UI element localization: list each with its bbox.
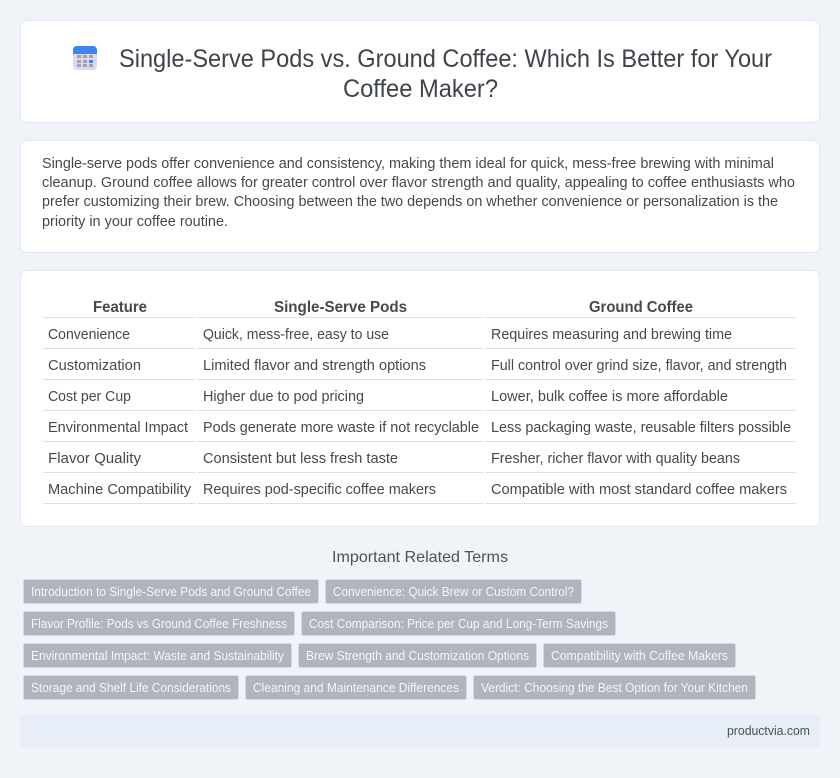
panel: comparison table [20,270,820,526]
related term tags: Verdict: Choosing the Best Option for Your Kitchen [481,680,748,695]
row: convenience: Requires measuring and brewing time [491,327,732,343]
related term tags: Compatibility with Coffee Makers [551,648,728,663]
panel: intro text: Single-serve pods offer convenience and consistency, making them ideal for quick, mess-free brewing with minimal [42,156,774,172]
related term tags: Flavor Profile: Pods vs Ground Coffee Freshness [31,616,287,631]
row: flavor quality: Flavor Quality [48,451,142,467]
row: flavor quality: Consistent but less fresh taste [203,451,398,467]
table header: Single-Serve Pods [274,299,407,316]
title card [20,20,820,122]
related term tags: Convenience: Quick Brew or Custom Control? [333,584,574,599]
title: Coffee Maker? [343,75,498,103]
row: cost per cup: Lower, bulk coffee is more affordable [491,389,728,405]
table header [93,299,693,316]
related term tags: Introduction to Single-Serve Pods and Ground Coffee [31,584,311,599]
row: environmental impact [48,420,791,436]
row: customization: Customization [48,358,141,374]
title: Single-Serve Pods vs. Ground Coffee: Which Is Better for Your [119,45,772,73]
row: environmental impact: Environmental Impact [48,420,188,436]
row: customization: Full control over grind size, flavor, and strength [491,358,787,374]
row: convenience [48,327,732,343]
row: customization [48,358,787,374]
row: cost per cup [48,389,728,405]
row: environmental impact: Less packaging waste, reusable filters possible [491,420,791,436]
table header: Feature [93,299,147,316]
related term tags: Brew Strength and Customization Options [306,648,529,663]
icon: calendar [73,46,97,70]
panel: intro text: prefer customizing their brew. Choosing between the two depends on whether convenience or personalization is the [42,194,778,210]
row: flavor quality [48,451,740,467]
row: cost per cup: Cost per Cup [48,389,131,405]
row: cost per cup: Higher due to pod pricing [203,389,364,405]
row: convenience: Convenience [48,327,130,343]
row: flavor quality: Fresher, richer flavor with quality beans [491,451,740,467]
panel: intro text: cleanup. Ground coffee allows for greater control over flavor strength and quality, appealing to coffee enthusiasts who [42,175,795,191]
row: environmental impact: Pods generate more waste if not recyclable [203,420,479,436]
related term tags: Cleaning and Maintenance Differences [253,680,459,695]
row: customization: Limited flavor and strength options [203,358,426,374]
row: machine compatibility: Requires pod-specific coffee makers [203,482,436,498]
related term tags [24,580,756,700]
row: convenience: Quick, mess-free, easy to use [203,327,389,343]
panel: intro text: priority in your coffee routine. [42,214,228,230]
heading: related terms: Important Related Terms [332,549,508,566]
related term tags: Cost Comparison: Price per Cup and Long-Term Savings [309,616,608,631]
related term tags: Storage and Shelf Life Considerations [31,680,231,695]
related term tags: Environmental Impact: Waste and Sustainability [31,648,284,663]
row: machine compatibility: Machine Compatibility [48,482,192,498]
panel: intro text [20,140,820,252]
title [119,45,772,103]
table header: Ground Coffee [589,299,693,316]
footer bar [20,714,820,748]
footer bar: productvia.com [727,724,810,738]
row: machine compatibility [48,482,787,498]
row: machine compatibility: Compatible with most standard coffee makers [491,482,787,498]
